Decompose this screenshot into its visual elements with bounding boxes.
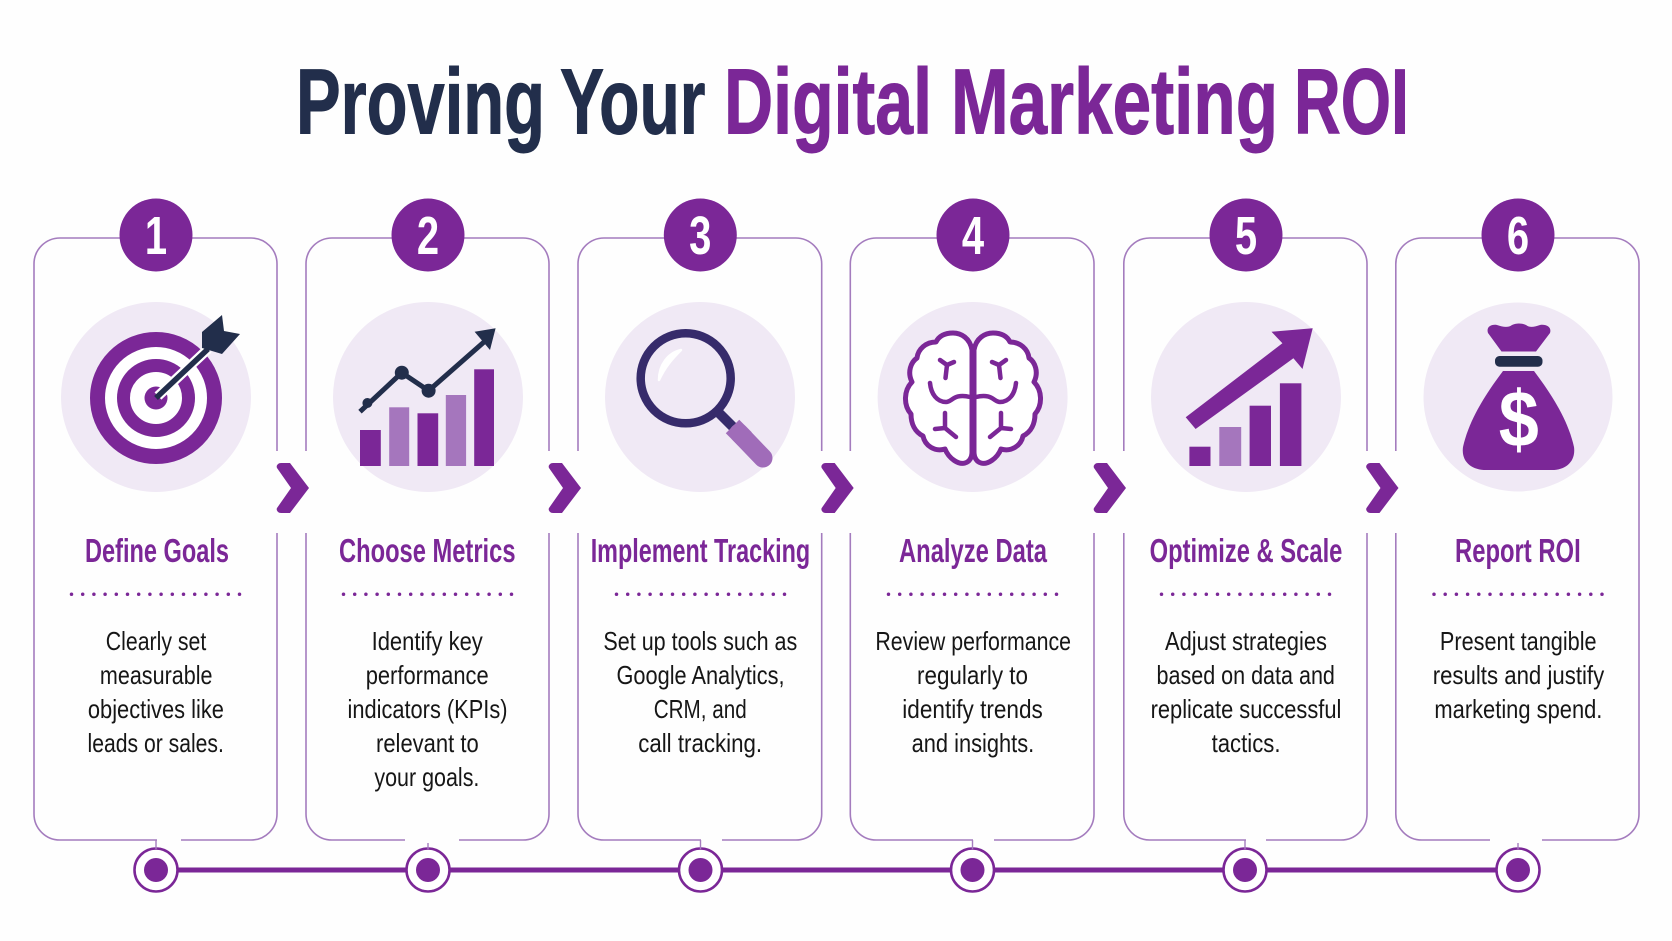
body text [875,626,1071,758]
panel: step 2 choose metrics [302,198,553,849]
dotted divider [616,593,786,596]
body text [1433,626,1604,724]
timeline [134,848,1540,892]
body text: objectives like [88,694,224,724]
arrow: step 2 to 3 [549,463,581,513]
body text: Identify key [372,626,483,656]
body text: Clearly set [106,626,207,656]
body text: CRM, and [654,694,747,724]
body text: performance [366,660,489,690]
body text: marketing spend. [1434,694,1602,724]
body text: Review performance [875,626,1071,656]
number badge 6: 6 [1507,206,1529,267]
body text [1151,626,1341,758]
arrow: step 3 to 4 [821,463,854,513]
number badge 2: 2 [417,206,439,267]
timeline node 1 [134,848,178,892]
body text: call tracking. [638,728,762,758]
body text [348,626,508,792]
panel: step 1 define goals [34,198,281,849]
dotted divider [888,593,1058,596]
body text: relevant to [376,728,479,758]
title: Proving [296,50,545,154]
timeline node 5 [1224,848,1266,892]
body text: regularly to [917,660,1028,690]
dotted divider [1434,593,1604,596]
body text: Present tangible [1440,626,1597,656]
body text: leads or sales. [88,728,224,758]
title [296,50,1409,154]
icon: money bag: $ [1499,375,1539,464]
body text: your goals. [374,762,479,792]
heading: Implement Tracking [591,532,810,569]
dotted divider [344,593,513,596]
timeline node 2 [406,848,450,892]
heading: Analyze Data [899,532,1047,569]
icon: growth bars with arrow [1151,302,1341,492]
body text: measurable [100,660,212,690]
body text: indicators (KPIs) [348,694,508,724]
body text: Set up tools such as [603,626,797,656]
number badge 5: 5 [1235,206,1257,267]
title: Your [560,50,706,154]
title: Digital [724,50,932,154]
icon: magnifying glass [605,302,795,492]
body text [603,626,797,758]
title: Marketing [951,50,1278,154]
heading: Optimize & Scale [1150,532,1342,569]
number badge 4 [936,198,1010,272]
number badge 3: 3 [689,206,711,267]
body text: identify trends [902,694,1043,724]
panel: step 4 analyze data [846,198,1098,849]
timeline node 4 [951,848,994,892]
body text: replicate successful [1151,694,1341,724]
icon: bar chart with trend arrow [333,302,523,492]
body text: and insights. [912,728,1034,758]
number badge 6 [1482,198,1554,272]
panel: step 5 optimize and scale [1120,198,1371,849]
number badge 2 [392,198,464,272]
number badge 1 [120,198,192,272]
arrow: step 1 to 2 [277,463,309,513]
body text: based on data and [1156,660,1335,690]
panel: step 6 report roi [1392,198,1639,849]
dotted divider [1162,593,1331,596]
body text: tactics. [1212,728,1280,758]
panel: step 3 implement tracking [574,198,826,849]
number badge 1: 1 [145,206,167,267]
body text [88,626,224,758]
icon: money bag [1424,302,1612,492]
title: ROI [1294,50,1409,154]
arrow: step 4 to 5 [1094,463,1126,513]
heading: Report ROI [1455,532,1581,569]
arrow: step 5 to 6 [1366,463,1398,513]
heading: Define Goals [85,532,229,569]
number badge 3 [664,198,737,272]
body text: results and justify [1433,660,1604,690]
icon: brain [878,302,1068,492]
heading: Choose Metrics [339,532,516,569]
timeline node 6 [1496,848,1540,892]
body text: Google Analytics, [616,660,784,690]
dotted divider [72,593,241,596]
number badge 5 [1210,198,1282,272]
icon: target with arrow [61,302,251,492]
number badge 4: 4 [962,206,985,267]
timeline node 3 [679,848,722,892]
body text: Adjust strategies [1165,626,1327,656]
